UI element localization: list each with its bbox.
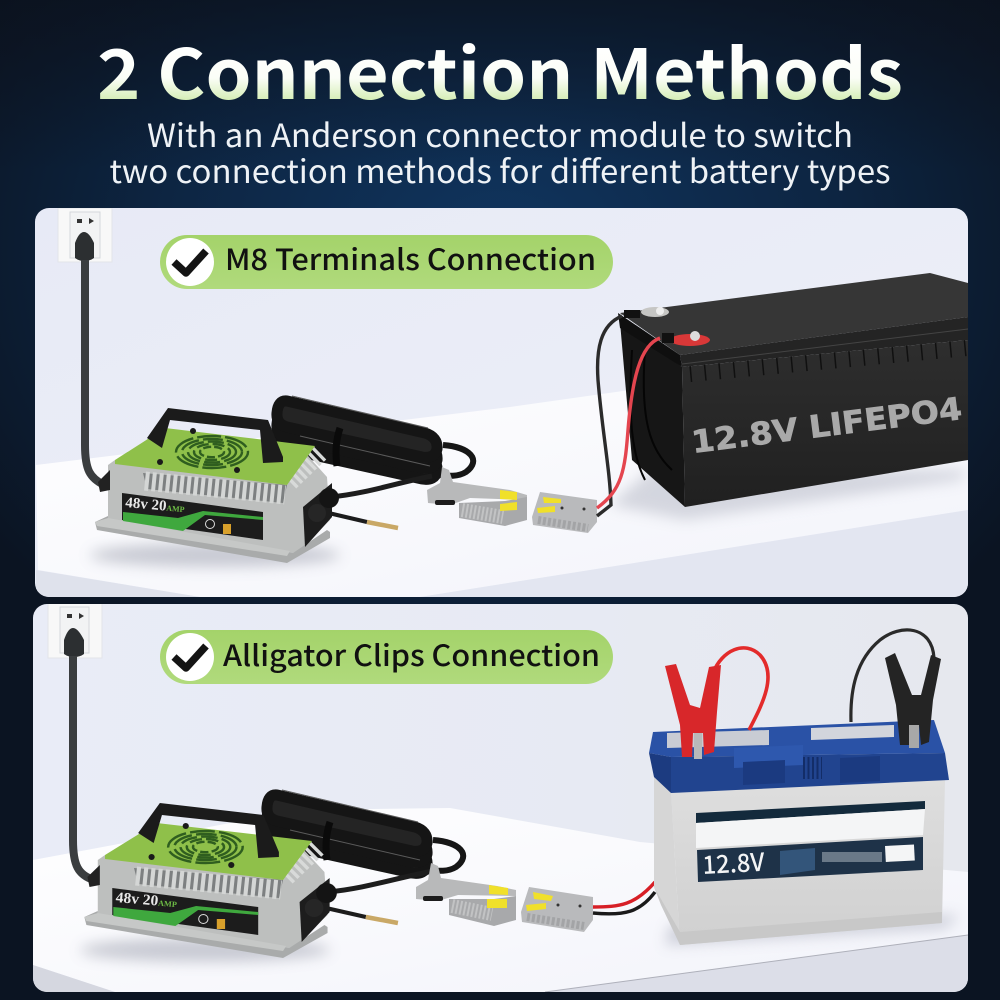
red alligator clip	[665, 664, 721, 759]
Anderson connector with handle	[416, 863, 516, 926]
Anderson connector with handle	[427, 467, 527, 526]
charger label	[112, 888, 258, 935]
LiFePO4 battery	[618, 273, 968, 507]
Anderson connector, battery side	[521, 887, 593, 932]
icon: check	[166, 238, 214, 286]
handle	[147, 408, 283, 463]
power cord	[73, 656, 94, 880]
charger	[95, 408, 432, 563]
title: 2 Connection Methods	[97, 19, 903, 119]
cable coil	[267, 790, 463, 873]
badge: alligator clips	[160, 630, 613, 684]
battery label	[696, 801, 925, 882]
charger	[84, 803, 433, 958]
charger label: 48v 20AMP	[115, 889, 178, 911]
battery wires	[597, 316, 660, 516]
terminal: positive	[662, 331, 710, 346]
cooling fan	[176, 436, 248, 468]
output glands	[303, 483, 332, 547]
badge: M8 terminals: M8 Terminals Connection	[225, 237, 596, 279]
clip wires	[713, 630, 934, 730]
output glands	[300, 878, 330, 942]
charger label	[122, 493, 263, 540]
power cord	[85, 260, 104, 485]
panel: M8 terminals connection	[33, 208, 968, 597]
subtitle: With an Anderson connector module to switch	[147, 111, 853, 157]
badge: M8 terminals	[160, 235, 613, 289]
battery shadow	[610, 470, 968, 520]
charger label: 48v 20AMP	[125, 495, 185, 516]
battery label: 12.8V	[702, 843, 765, 882]
charger shadow	[80, 938, 330, 962]
black alligator clip	[885, 653, 941, 748]
subtitle: two connection methods for different battery types	[110, 147, 890, 193]
badge: alligator clips: Alligator Clips Connection	[223, 633, 600, 675]
charger shadow	[90, 543, 340, 567]
battery lid	[649, 720, 949, 793]
handle	[138, 803, 279, 858]
battery text: 12.8V LIFEPO4	[689, 391, 964, 461]
cooling fan	[168, 831, 243, 863]
cable coil	[277, 396, 473, 479]
subtitle	[110, 111, 890, 193]
wall outlet	[58, 208, 112, 262]
panel: alligator clips connection	[33, 603, 968, 992]
terminal: negative	[624, 307, 669, 318]
battery shadow	[665, 915, 960, 945]
wall outlet	[48, 603, 102, 658]
lead-acid battery	[649, 720, 949, 945]
Anderson connector, battery side	[532, 492, 597, 533]
icon: check	[166, 633, 214, 681]
battery wires	[593, 882, 655, 914]
